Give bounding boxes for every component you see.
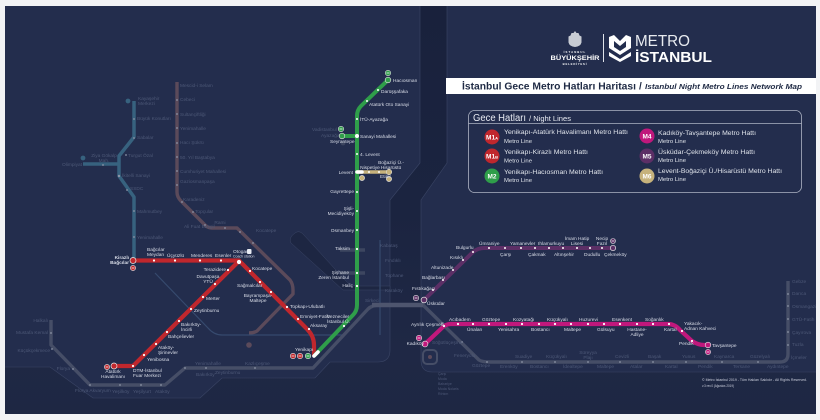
legend item M1B: M1B (486, 154, 498, 160)
legend: night lines (468, 110, 802, 192)
faded station labels: Moda Nolaris (438, 387, 459, 391)
line M4: magenta Kadıköy - Tavşantepe: Ayrılık Çeşmesi (411, 322, 444, 328)
logo: Metro İstanbul: METRO (635, 33, 690, 50)
line M5: purple Üsküdar - Çekmeköy: Çekmeköy (604, 252, 627, 258)
faded station labels: Pendik (698, 364, 713, 370)
line M1: red Yenikapı - Atatürk Havalimanı and Kirazlı: Şirinevler (158, 350, 178, 356)
faded station labels: Mahmutbey (137, 209, 163, 215)
line M1: red Yenikapı - Atatürk Havalimanı and Kirazlı: Bağcılar (110, 260, 129, 266)
faded station labels: Vadistanbul (312, 127, 337, 133)
faded station labels: Küçükçekmece (17, 348, 50, 354)
faded station labels: Sultançiftliği (180, 112, 206, 118)
legend item M6: Levent-Boğaziçi Ü./Hisarüstü Metro Hattı (658, 167, 782, 175)
logo: İstanbul Büyükşehir Belediyesi: BELEDİYESİ (563, 61, 587, 66)
line M1: red Yenikapı - Atatürk Havalimanı and Kirazlı: Bahçelievler (168, 334, 195, 340)
line M4: magenta Kadıköy - Tavşantepe: Yenisahra (498, 327, 519, 333)
faded station labels: Ali Fuat Başgil (184, 224, 215, 230)
legend item M1A: Metro Line (504, 139, 532, 145)
faded station labels: Tophane (385, 273, 404, 279)
line M5: purple Üsküdar - Çekmeköy: Çarşı (500, 252, 511, 258)
line M2: green Yenikapı - Hacıosman: Levent (339, 170, 354, 176)
line M5: purple Üsküdar - Çekmeköy: Ümraniye (479, 240, 500, 247)
line M4: magenta Kadıköy - Tavşantepe: Maltepe (564, 327, 581, 333)
line M5: purple Üsküdar - Çekmeköy: Dudullu (584, 252, 601, 258)
line M5: purple Üsküdar - Çekmeköy: Lisesi (571, 241, 583, 247)
line M1: red Yenikapı - Atatürk Havalimanı and Kirazlı: Emniyet-Fatih (300, 314, 330, 320)
legend item M2: Yenikapı-Hacıosman Metro Hattı (504, 169, 603, 176)
copyright note: v.3 rev.0 (Ağustos 2019) (702, 384, 734, 388)
line M2: green Yenikapı - Hacıosman: Gayrettepe (330, 189, 354, 195)
faded station labels: Bostancı (530, 364, 549, 370)
faded station labels: Osmangazi (792, 304, 816, 310)
line M5: purple Üsküdar - Çekmeköy: Bulgurlu (456, 245, 474, 251)
line M1: red Yenikapı - Atatürk Havalimanı and Kirazlı: Meydan (147, 252, 164, 258)
line M4: magenta Kadıköy - Tavşantepe: Kartal (664, 327, 677, 333)
legend item M5: Üsküdar-Çekmeköy Metro Hattı (658, 148, 755, 156)
legend item M2 (484, 168, 603, 184)
faded station labels: Yenimahalle (195, 361, 221, 367)
line M4: magenta Kadıköy - Tavşantepe (407, 317, 737, 355)
faded station labels: Plajı (583, 355, 593, 361)
line M1: red Yenikapı - Atatürk Havalimanı and Kirazlı: Otogar (233, 249, 248, 255)
line M1: red Yenikapı - Atatürk Havalimanı and Kirazlı: Topkapı-Ulubatlı (290, 304, 325, 310)
faded station labels: Feneryolu (454, 353, 476, 359)
faded station labels: Cumhuriyet Mahallesi (180, 169, 226, 175)
line M2: green Yenikapı - Hacıosman: 4. Levent (360, 152, 380, 158)
faded station labels: Küçükyalı (546, 354, 567, 360)
faded station labels: Ataköy (155, 389, 170, 395)
faded station labels: Yeşilyurt (133, 389, 152, 395)
line M2: green Yenikapı - Hacıosman: İstanbul Ü. (327, 318, 350, 325)
line M5: purple Üsküdar - Çekmeköy: Fazıl (597, 241, 607, 247)
line M5: purple Üsküdar - Çekmeköy: Necip (596, 236, 608, 242)
faded station labels: Merkezi (138, 101, 155, 107)
line M1: red Yenikapı - Atatürk Havalimanı and Kirazlı (101, 247, 330, 380)
faded station labels: Karaköy (385, 288, 403, 294)
faded station labels: Sirkeci (365, 298, 379, 304)
legend item M5: M5 (642, 154, 652, 160)
faded station labels: Gebze (792, 279, 806, 285)
copyright note (702, 377, 807, 388)
faded station labels: Rami (214, 220, 226, 226)
line M2: green Yenikapı - Hacıosman: Sanayi Mahallesi (360, 134, 396, 140)
faded station labels: 50. Yıl Baştabya (180, 155, 215, 161)
line M4: magenta Kadıköy - Tavşantepe: Göztepe (482, 317, 500, 323)
line M1: red Yenikapı - Atatürk Havalimanı and Kirazlı: Havalimanı (101, 374, 125, 380)
copyright note: © Metro İstanbul 2019 - Tüm Hakları Saklıdır - All Rights Reserved. (702, 377, 807, 382)
line M4: magenta Kadıköy - Tavşantepe: Hastane- (627, 327, 647, 333)
faded station labels: Yunus (682, 354, 696, 360)
line M2: green Yenikapı - Hacıosman: Seyrantepe (330, 139, 355, 145)
line M1: red Yenikapı - Atatürk Havalimanı and Kirazlı: Yenikapı (295, 347, 313, 353)
line M1: red Yenikapı - Atatürk Havalimanı and Kirazlı: Menderes (191, 253, 213, 259)
title band: Istanbul Night Metro Lines Network Map (645, 82, 802, 91)
line M2: green Yenikapı - Hacıosman (314, 70, 418, 356)
line M5: purple Üsküdar - Çekmeköy: Bağlarbaşı (422, 275, 445, 281)
faded station labels: Yeşilköy (112, 389, 130, 395)
line M6: Levent - Boğaziçi Ü./Hisarüstü: Boğaziçi Ü.- (378, 159, 404, 166)
line M4: magenta Kadıköy - Tavşantepe: Adliye (630, 332, 644, 338)
line M2: green Yenikapı - Hacıosman: Vezneciler (327, 314, 350, 320)
logo: İstanbul Büyükşehir Belediyesi: İSTANBUL (564, 49, 586, 54)
faded station labels: Kabataş (380, 243, 398, 249)
faded station labels: Söğütlüçeşme (432, 340, 463, 346)
faded station labels: SSDC (130, 186, 144, 192)
line M4: magenta Kadıköy - Tavşantepe: Yakacık- (684, 321, 703, 327)
faded station labels: Maltepe (597, 364, 614, 370)
faded station labels: Rıhtım (438, 392, 448, 396)
line M5: purple Üsküdar - Çekmeköy: Ihlamurkuyu (538, 241, 564, 247)
line M1: red Yenikapı - Atatürk Havalimanı and Kirazlı: DTM-İstanbul (133, 367, 162, 374)
line M6: Levent - Boğaziçi Ü./Hisarüstü: Hisarüstü (381, 165, 401, 171)
legend heading: / Night Lines (529, 114, 571, 123)
title band: / (639, 82, 642, 92)
line M5: purple Üsküdar - Çekmeköy: Çakmak (528, 252, 546, 258)
line M1: red Yenikapı - Atatürk Havalimanı and Kirazlı: İncirli (181, 326, 192, 333)
line M1: red Yenikapı - Atatürk Havalimanı and Kirazlı: Bakırköy- (181, 322, 202, 328)
logo: İstanbul Büyükşehir Belediyesi (550, 31, 600, 66)
line M1: red Yenikapı - Atatürk Havalimanı and Kirazlı: Zeytinburnu (194, 308, 220, 314)
line M1: red Yenikapı - Atatürk Havalimanı and Kirazlı: Yenibosna (147, 357, 170, 363)
faded station labels: İçmeler (791, 354, 807, 361)
line M2: green Yenikapı - Hacıosman: Darüşşafaka (381, 89, 408, 95)
line M4: magenta Kadıköy - Tavşantepe: Tavşantepe (712, 343, 737, 349)
faded lines of the daytime network (50, 82, 789, 386)
line M1: red Yenikapı - Atatürk Havalimanı and Kirazlı: Kocatepe (252, 266, 273, 272)
line M5: purple Üsküdar - Çekmeköy: Fıstıkağacı (412, 286, 435, 292)
faded station labels: Yenimahalle (137, 235, 163, 241)
faded station labels: Florya Akvaryum (75, 388, 111, 394)
line M1: red Yenikapı - Atatürk Havalimanı and Kirazlı: Fuar Merkezi (133, 373, 161, 379)
faded station labels: Aydıntepe (767, 364, 789, 370)
line M2: green Yenikapı - Hacıosman: Zeren İstanbul (318, 274, 349, 281)
faded station labels: Güzelyalı (750, 354, 770, 360)
faded station labels: Turgut Özal (128, 152, 153, 159)
legend heading (473, 113, 571, 124)
line M4: magenta Kadıköy - Tavşantepe: Pendik (679, 341, 694, 347)
line M4: magenta Kadıköy - Tavşantepe: Huzurevi (579, 317, 598, 323)
logo: İstanbul Büyükşehir Belediyesi: BÜYÜKŞEHİR (550, 53, 600, 62)
faded station labels: Ayazağa (321, 133, 340, 139)
line M2: green Yenikapı - Hacıosman: Osmanbey (331, 228, 355, 234)
faded station labels: Çayırova (792, 330, 812, 336)
faded station labels: Cebeci (180, 97, 195, 103)
line M5: purple Üsküdar - Çekmeköy: İmam Hatip (565, 235, 590, 242)
line M5: purple Üsküdar - Çekmeköy: Üsküdar (427, 300, 445, 307)
line M1: red Yenikapı - Atatürk Havalimanı and Kirazlı: YTÜ (203, 278, 213, 285)
logo: Metro İstanbul: İSTANBUL (635, 49, 712, 66)
line M2: green Yenikapı - Hacıosman: Hacıosman (393, 78, 418, 84)
line M5: purple Üsküdar - Çekmeköy (412, 235, 627, 307)
faded station labels: Sabalar (137, 135, 154, 141)
legend item M6 (640, 167, 782, 184)
line M6: Levent - Boğaziçi Ü./Hisarüstü (357, 159, 404, 182)
title band (446, 78, 816, 94)
faded station labels: Büyük Konutları (137, 116, 171, 122)
legend item M4: Kadıköy-Tavşantepe Metro Hattı (658, 130, 756, 137)
line M5: purple Üsküdar - Çekmeköy: Altunizade (431, 265, 454, 271)
faded station labels: Kocatepe (256, 228, 277, 234)
faded station labels: Moda (438, 377, 447, 381)
faded station labels: Süreyya (579, 350, 597, 356)
line M2: green Yenikapı - Hacıosman: Mecidiyeköy (328, 211, 355, 217)
line M1: red Yenikapı - Atatürk Havalimanı and Kirazlı: Aksaray (310, 323, 328, 329)
line M4: magenta Kadıköy - Tavşantepe: Kadıköy (407, 341, 425, 347)
line M5: purple Üsküdar - Çekmeköy: Kısıklı (450, 255, 463, 261)
faded station labels: Zeytinburnu (215, 370, 241, 376)
line M1: red Yenikapı - Atatürk Havalimanı and Kirazlı: Esenler (215, 253, 232, 259)
faded station labels: Cevizli (615, 354, 629, 360)
faded station labels: İdealtepe (563, 363, 583, 370)
line M4: magenta Kadıköy - Tavşantepe: Adnan Kahveci (684, 326, 716, 332)
title band: İstanbul Gece Metro Hatları Haritası (462, 80, 636, 92)
line M1: red Yenikapı - Atatürk Havalimanı and Kirazlı: Üçyüzlü (167, 252, 184, 259)
faded station labels (16, 83, 816, 396)
line M4: magenta Kadıköy - Tavşantepe: Ünalan (467, 326, 483, 333)
faded station labels: GTÜ-Fatih (792, 316, 815, 323)
line M1: red Yenikapı - Atatürk Havalimanı and Kirazlı: Atatürk (105, 369, 121, 375)
line M1: red Yenikapı - Atatürk Havalimanı and Kirazlı: Davutpaşa (197, 274, 220, 280)
line M6: Levent - Boğaziçi Ü./Hisarüstü: Etiler (380, 174, 391, 180)
line M4: magenta Kadıköy - Tavşantepe: Soğanlık (645, 317, 664, 323)
faded station labels: Kartal (665, 364, 678, 370)
faded station labels: Kaynarca (714, 354, 735, 360)
line M4: magenta Kadıköy - Tavşantepe: Gülsuyu (597, 327, 615, 333)
legend item M4 (640, 128, 756, 145)
line M2: green Yenikapı - Hacıosman: Atatürk Oto Sanayi (369, 102, 409, 108)
legend item M5 (640, 148, 755, 164)
faded station labels: İkitelli Sanayi (122, 172, 150, 179)
legend item M2: M2 (487, 174, 497, 180)
faded station labels: Olimpiyat (62, 162, 83, 168)
faded station labels: Yenimahalle (180, 126, 206, 132)
legend item M1B: Metro Line (504, 158, 532, 164)
line M1: red Yenikapı - Atatürk Havalimanı and Kirazlı: Bayrampaşa- (244, 293, 273, 299)
faded station labels: Kazlıçeşme (245, 361, 270, 367)
faded station labels: Halkalı (33, 318, 48, 324)
line M4: magenta Kadıköy - Tavşantepe: Acıbadem (449, 317, 471, 323)
line M2: green Yenikapı - Hacıosman: Şişhane (332, 270, 349, 276)
line M5: purple Üsküdar - Çekmeköy: Yamanevler (510, 241, 536, 247)
faded station labels: Darıca (792, 291, 806, 297)
faded station labels: Hacı Şükrü (180, 140, 204, 146)
faded station labels: Mescid-i Selam (180, 83, 213, 89)
faded station labels: Tuzla (792, 342, 804, 348)
Yenikapı terminal caps (290, 353, 311, 359)
line M2: green Yenikapı - Hacıosman: Taksim (335, 246, 350, 252)
legend item M1B (484, 148, 588, 164)
legend item M1A (484, 129, 628, 145)
line M4: magenta Kadıköy - Tavşantepe: Küçükyalı (547, 317, 568, 323)
line M6: Levent - Boğaziçi Ü./Hisarüstü: Nispetiye (360, 165, 380, 171)
faded station labels: Mustafa Kemal (16, 330, 48, 336)
line M2: green Yenikapı - Hacıosman: Haliç (342, 283, 354, 289)
line M5: purple Üsküdar - Çekmeköy: Altınşehir (554, 252, 574, 258)
line M1: red Yenikapı - Atatürk Havalimanı and Kirazlı: Merter (206, 296, 220, 302)
legend item M2: Metro Line (504, 178, 532, 184)
faded station labels: Fındıklı (385, 258, 401, 264)
faded station labels: Erenköy (500, 364, 518, 370)
line M1: red Yenikapı - Atatürk Havalimanı and Kirazlı: Bağcılar (147, 247, 165, 253)
faded station labels: Suadiye (515, 354, 533, 360)
line M1: red Yenikapı - Atatürk Havalimanı and Kirazlı: Kirazlı (115, 255, 129, 261)
line M1: red Yenikapı - Atatürk Havalimanı and Kirazlı: Sağmalcılar (237, 283, 263, 289)
legend item M1A: Yenikapı-Atatürk Havalimanı Metro Hattı (504, 129, 628, 136)
faded station labels: Kayaşehir (138, 96, 160, 102)
legend item M1B: Yenikapı-Kirazlı Metro Hattı (504, 149, 588, 156)
legend item M6: M6 (642, 174, 652, 180)
faded station labels: Çarşı (438, 372, 446, 376)
faded station labels: Başak (648, 354, 662, 360)
faded station labels: Bahariye (438, 382, 452, 386)
logo: Metro İstanbul (603, 33, 712, 66)
line M4: magenta Kadıköy - Tavşantepe: Esenkent (612, 317, 633, 323)
legend heading: Gece Hatları (473, 113, 526, 124)
faded station labels: Topçular (195, 209, 214, 215)
faded station labels: Göztepe (472, 363, 490, 369)
legend item M5: Metro Line (658, 158, 686, 164)
legend item M4: M4 (642, 134, 652, 140)
line M2: green Yenikapı - Hacıosman: Şişli- (344, 206, 354, 212)
legend item M4: Metro Line (658, 139, 686, 145)
faded station labels: Gaziosmanpaşa (180, 179, 215, 185)
legend item M6: Metro Line (658, 177, 686, 183)
line M4: magenta Kadıköy - Tavşantepe: Kozyatağı (513, 317, 534, 323)
faded station labels: Florya (57, 366, 70, 372)
line M1: red Yenikapı - Atatürk Havalimanı and Kirazlı: Ataköy- (158, 345, 175, 351)
legend item M1A: M1A (486, 134, 498, 142)
line M1: red Yenikapı - Atatürk Havalimanı and Kirazlı: Terazidere (204, 267, 226, 273)
faded station labels: Karadeniz (183, 197, 205, 203)
line M1: red Yenikapı - Atatürk Havalimanı and Kirazlı: Coach station (233, 254, 254, 258)
line M2: green Yenikapı - Hacıosman: İTÜ-Ayazağa (360, 116, 388, 123)
faded station labels: Mah. (99, 158, 109, 164)
faded station labels: Atalar (630, 364, 643, 370)
line M4: magenta Kadıköy - Tavşantepe: Bostancı (531, 327, 550, 333)
faded station labels: Ziya Gökalp (91, 153, 117, 159)
faded station labels: Tersane (733, 364, 750, 370)
icon: otogar coach (247, 249, 252, 254)
line M1: red Yenikapı - Atatürk Havalimanı and Kirazlı: Maltepe (249, 298, 267, 304)
faded station labels: Bakırköy (196, 372, 215, 378)
